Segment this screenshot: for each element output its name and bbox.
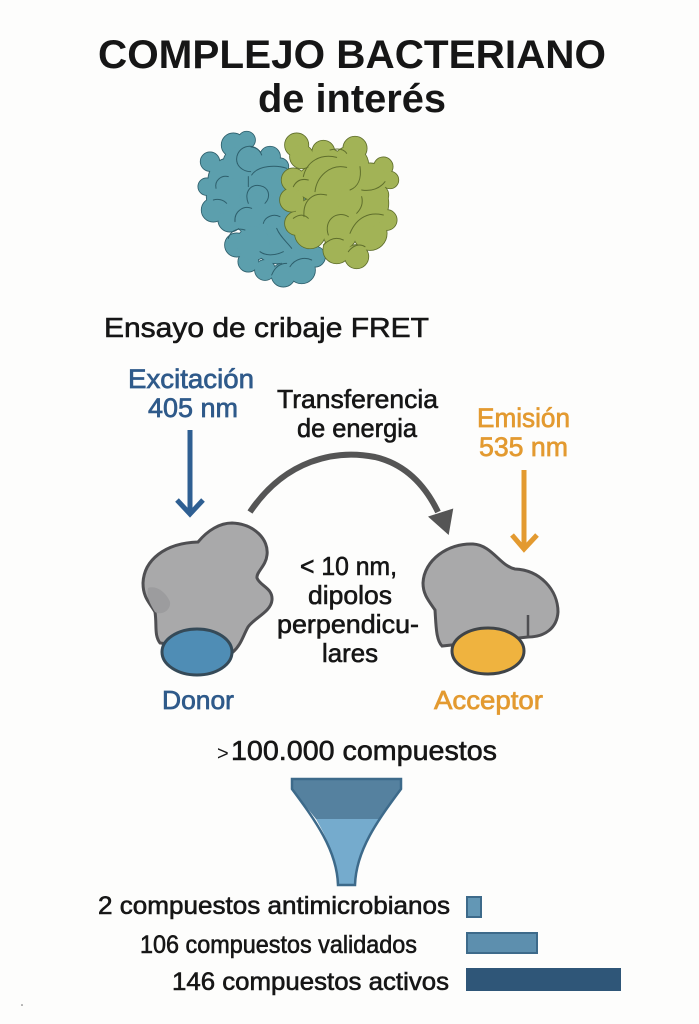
excitation label xyxy=(128,364,254,423)
result: active compounds xyxy=(172,968,621,996)
compounds count heading: > xyxy=(217,743,229,765)
emission label xyxy=(477,403,570,462)
energy transfer label: Transferencia xyxy=(277,384,439,414)
arrow: emission xyxy=(512,470,537,549)
distance note: lares xyxy=(322,638,378,668)
emission label: 535 nm xyxy=(479,432,568,462)
distance note: perpendicu- xyxy=(277,609,419,639)
arrow: excitation xyxy=(177,430,203,514)
teal protein subunit xyxy=(198,132,325,287)
result: active compounds: 146 compuestos activos xyxy=(172,968,449,996)
energy transfer label: de energia xyxy=(297,413,418,443)
icon: screening funnel xyxy=(292,779,401,885)
donor protein xyxy=(143,523,272,675)
distance note: < 10 nm, xyxy=(300,551,397,581)
donor fluorophore xyxy=(162,629,232,675)
acceptor label: Acceptor xyxy=(434,685,543,715)
title xyxy=(98,33,606,121)
result: antimicrobial compounds: 2 compuestos antimicrobianos xyxy=(98,892,450,920)
title: de interés xyxy=(258,77,446,121)
compounds count heading: 100.000 compuestos xyxy=(231,735,497,766)
excitation label: Excitación xyxy=(128,364,254,394)
energy transfer label xyxy=(277,384,439,443)
heading: FRET screening assay: Ensayo de cribaje FRET xyxy=(104,312,429,343)
emission label: Emisión xyxy=(477,403,570,433)
donor label: Donor xyxy=(162,685,234,715)
olive protein subunit xyxy=(280,133,398,268)
icon: bacterial protein complex xyxy=(198,132,398,287)
acceptor fluorophore xyxy=(452,628,524,674)
acceptor protein xyxy=(423,544,558,674)
distance note xyxy=(277,551,419,668)
excitation label: 405 nm xyxy=(148,393,238,423)
result: validated compounds: 106 compuestos validados xyxy=(140,931,417,959)
arrow: energy transfer xyxy=(250,455,452,533)
distance note: dipolos xyxy=(308,580,392,610)
title: COMPLEJO BACTERIANO xyxy=(98,33,606,77)
